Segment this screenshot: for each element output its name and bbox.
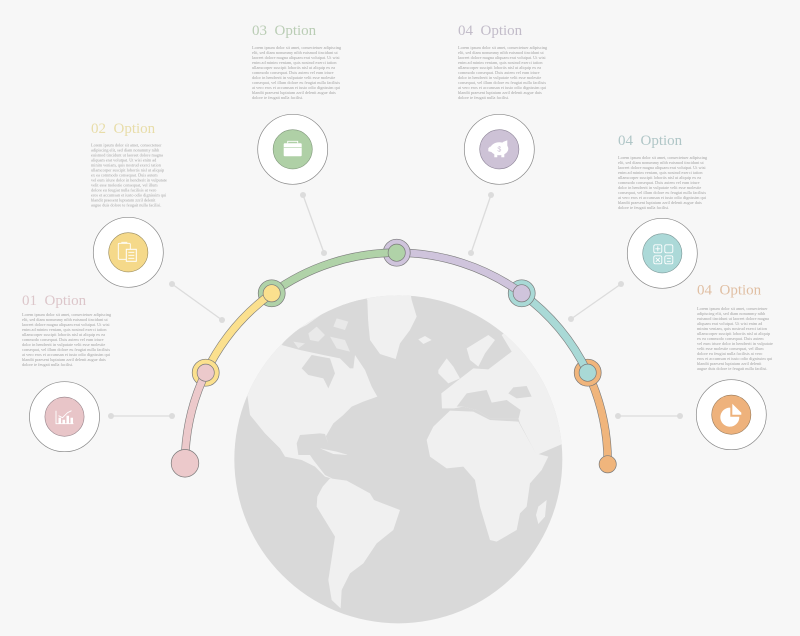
option 03 text: commodo consequat. Duis autem vel eum iriure [252,70,334,75]
option 02 text: vel eum iriure dolor in hendrerit in vulputate [91,177,167,182]
option 02 text: velit esse molestie consequat, vel illum [91,182,158,188]
option 03 text: ullamcorper suscipit lobortis nisl ut aliquip ex ea [252,65,335,70]
icon: calculator badge [627,218,697,288]
option 04 text (orange): eros et accumsan et iusto odio dignissim qui [697,356,773,361]
option 01 text: laoreet dolore magna aliquam erat volutpat. Ut wisi [22,322,110,327]
option 03 text: dolor in hendrerit in vulputate velit esse molestie [252,75,335,80]
globe [230,290,570,623]
option 01 text [22,293,112,367]
option 04 text (purple): laoreet dolore magna aliquam erat volutpat. Ut wisi [458,55,546,60]
connector lines [108,192,683,419]
option 03 text: consequat, vel illum dolore eu feugiat nulla facilisis [252,80,340,86]
option 04 text (teal): laoreet dolore magna aliquam erat volutpat. Ut wisi [618,165,706,170]
icon: piggy bank badge [464,114,534,184]
option 03 text: dolore te feugait nulla facilisi. [252,95,303,100]
option 02 text: augue duis dolore te feugait nulla facilisi. [91,202,161,207]
option 01 text: consequat, vel illum dolore eu feugiat nulla facilisis [22,347,110,353]
arc segment: yellow [192,285,280,386]
option 03 text: Lorem ipsum dolor sit amet, consectetuer adipiscing [252,45,342,51]
option 04 text (teal): at vero eros et accumsan et iusto odio dignissim qui [618,195,707,200]
arctic islands [293,318,350,352]
icon: chart badge [30,382,100,452]
option 02 text: Lorem ipsum dolor sit amet, consectetuer [91,142,162,148]
option 04 text (purple): dolor in hendrerit in vulputate velit esse molestie [458,75,541,80]
option 04 text (orange): dolore eu feugiat nulla facilisis at vero [697,351,762,356]
option 04 text (orange): Lorem ipsum dolor sit amet, consectetuer [697,306,768,312]
option 01 text: ullamcorper suscipit lobortis nisl ut aliquip ex ea [22,332,105,337]
option 04 text (purple): consequat, vel illum dolore eu feugiat nulla facilisis [458,80,546,86]
option 03 text: enim ad minim veniam, quis nostrud exerci tation [252,60,337,66]
option 04 text (teal): commodo consequat. Duis autem vel eum iriure [618,180,700,185]
option 04 text (orange): adipiscing elit, sed diam nonummy nibh [697,311,766,317]
option 04 text (orange): 04 Option [697,282,762,298]
icon: documents badge [93,217,163,287]
option 04 text (teal): ullamcorper suscipit lobortis nisl ut aliquip ex ea [618,175,701,180]
option 02 text: blandit praesent luptatum zzril delenit [91,197,156,202]
option 03 text: laoreet dolore magna aliquam erat volutpat. Ut wisi [252,55,340,60]
option 02 text: ex ea commodo consequat. Duis autem [91,172,158,177]
icon: briefcase badge [258,114,328,184]
option 03 text: at vero eros et accumsan et iusto odio dignissim qui [252,85,341,90]
option 02 text: adipiscing elit, sed diam nonummy nibh [91,147,160,153]
option 04 text (orange) [697,282,774,371]
option 01 text: blandit praesent luptatum zzril delenit augue duis [22,357,106,362]
option 04 text (teal): consequat, vel illum dolore eu feugiat nulla facilisis [618,190,706,196]
option 04 text (teal): elit, sed diam nonummy nibh euismod tincidunt ut [618,160,705,166]
option 01 text: commodo consequat. Duis autem vel eum iriure [22,337,104,342]
option 04 text (purple): Lorem ipsum dolor sit amet, consectetuer adipiscing [458,45,548,51]
option 02 text: dolore eu feugiat nulla facilisis at vero [91,187,156,192]
option 04 text (teal): blandit praesent luptatum zzril delenit augue duis [618,200,702,205]
option 04 text (purple) [458,23,548,100]
option 04 text (orange): velit esse molestie consequat, vel illum [697,346,764,352]
icon: pie chart badge [696,380,766,450]
option 01 text: 01 Option [22,293,87,309]
arc timeline [171,239,616,477]
arc segment: pink [171,364,214,477]
option 04 text (teal): dolore te feugait nulla facilisi. [618,205,669,210]
option 04 text (orange): euismod tincidunt ut laoreet dolore magna [697,316,769,321]
option 04 text (teal): enim ad minim veniam, quis nostrud exerci tation [618,170,703,176]
option 04 text (teal): dolor in hendrerit in vulputate velit esse molestie [618,185,701,190]
option 02 text: aliquam erat volutpat. Ut wisi enim ad [91,157,157,162]
option 04 text (orange): vel eum iriure dolor in hendrerit in vulputate [697,341,773,346]
option 04 text (orange): augue duis dolore te feugait nulla facilisi. [697,366,767,371]
option 03 text: blandit praesent luptatum zzril delenit augue duis [252,90,336,95]
option 04 text (teal): 04 Option [618,133,683,149]
arc segment: green [258,244,405,307]
option 04 text (orange): minim veniam, quis nostrud exerci tation [697,326,768,332]
option 04 text (purple): 04 Option [458,23,523,39]
option 01 text: elit, sed diam nonummy nibh euismod tincidunt ut [22,317,109,323]
option 02 text: 02 Option [91,121,156,137]
option 04 text (orange): ullamcorper suscipit lobortis nisl ut aliquip [697,331,770,336]
option 01 text: at vero eros et accumsan et iusto odio dignissim qui [22,352,111,357]
option 02 text [91,121,168,207]
option 04 text (purple): blandit praesent luptatum zzril delenit augue duis [458,90,542,95]
option 04 text (purple): at vero eros et accumsan et iusto odio dignissim qui [458,85,547,90]
icon: piggy bank badge: $ [497,146,501,153]
arc segment: teal [508,280,596,381]
option 02 text: euismod tincidunt ut laoreet dolore magna [91,152,163,157]
arctic ocean band [282,300,368,368]
option 04 text (purple): commodo consequat. Duis autem vel eum iriure [458,70,540,75]
option 02 text: minim veniam, quis nostrud exerci tation [91,162,162,168]
option 04 text (purple): ullamcorper suscipit lobortis nisl ut aliquip ex ea [458,65,541,70]
arc segment: orange [574,359,616,473]
arc segment: purple [383,239,530,302]
option 03 text [252,23,342,100]
option 03 text: elit, sed diam nonummy nibh euismod tincidunt ut [252,50,339,56]
option 01 text: dolore te feugait nulla facilisi. [22,362,73,367]
option 04 text (orange): ex ea commodo consequat. Duis autem [697,336,764,341]
option 04 text (teal): Lorem ipsum dolor sit amet, consectetuer adipiscing [618,155,708,161]
option 01 text: Lorem ipsum dolor sit amet, consectetuer adipiscing [22,312,112,318]
option 04 text (orange): aliquam erat volutpat. Ut wisi enim ad [697,321,763,326]
option 04 text (purple): dolore te feugait nulla facilisi. [458,95,509,100]
option 04 text (purple): elit, sed diam nonummy nibh euismod tincidunt ut [458,50,545,56]
option 02 text: eros et accumsan et iusto odio dignissim qui [91,192,167,197]
option 01 text: enim ad minim veniam, quis nostrud exerci tation [22,327,107,333]
option 01 text: dolor in hendrerit in vulputate velit esse molestie [22,342,105,347]
option 04 text (orange): blandit praesent luptatum zzril delenit [697,361,762,366]
option 02 text: ullamcorper suscipit lobortis nisl ut aliquip [91,167,164,172]
option 04 text (teal) [618,133,708,210]
option 03 text: 03 Option [252,23,317,39]
option 04 text (purple): enim ad minim veniam, quis nostrud exerci tation [458,60,543,66]
